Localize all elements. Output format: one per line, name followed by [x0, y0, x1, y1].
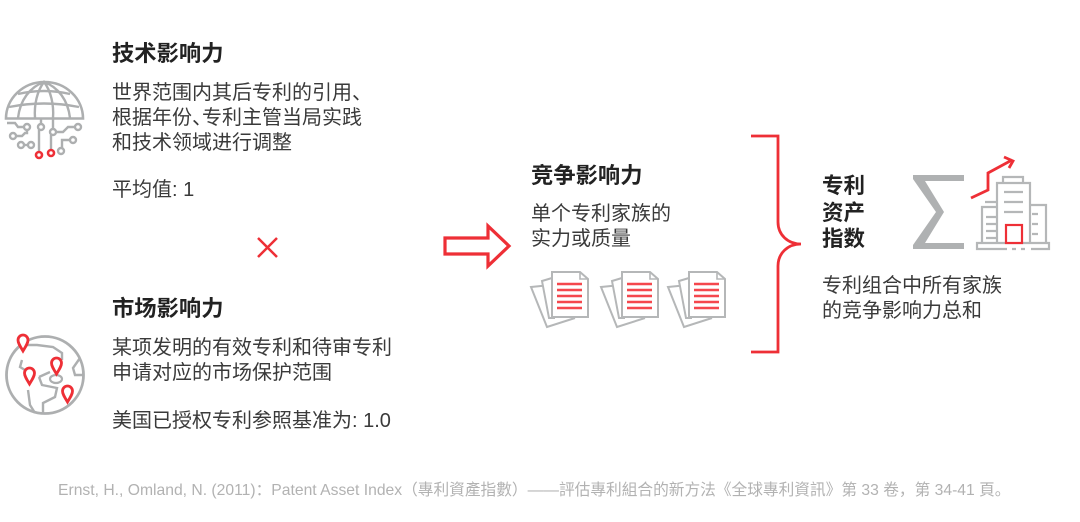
text: market impact description: [112, 337, 392, 384]
text: competitive impact description: [531, 203, 671, 250]
heading: patent asset index: 指数: [822, 227, 865, 251]
text: technology impact description: 世界范围内其后专利的引用、: [112, 82, 372, 104]
text: market impact description: 某项发明的有效专利和待审专利: [112, 337, 392, 359]
icon: document stack 3: [668, 272, 725, 327]
text: patent asset index description: 的竞争影响力总和: [822, 300, 982, 322]
heading: patent asset index: 资产: [822, 200, 865, 224]
icon: world map with pins: [6, 335, 84, 414]
icon: multiply sign: [258, 238, 277, 257]
text: patent asset index description: 专利组合中所有家族: [822, 275, 1002, 297]
text: patent asset index description: [822, 275, 1002, 322]
text: market impact description: 申请对应的市场保护范围: [112, 362, 332, 384]
icon: globe with circuit: [6, 82, 83, 154]
text: market benchmark: 美国已授权专利参照基准为: 1.0: [112, 410, 391, 432]
bracket: right curly brace: [751, 136, 801, 352]
source citation: Ernst, H., Omland, N. (2011)：Patent Asset Index（專利資產指數）——評估專利組合的新方法《全球專利資訊》第 33 卷，第 34-41 頁。: [58, 482, 1010, 499]
text: technology impact description: 根据年份、专利主管当局实践: [112, 107, 362, 129]
arrow: right outline arrow: [445, 226, 509, 266]
text: competitive impact description: 实力或质量: [531, 228, 631, 250]
heading: patent asset index: [822, 174, 865, 251]
text: competitive impact description: 单个专利家族的: [531, 203, 671, 225]
text: technology average: 平均值: 1: [112, 179, 194, 201]
heading: technology impact: 技术影响力: [112, 41, 224, 66]
icon: building with rising arrow: [971, 157, 1049, 249]
icon: sigma sign: [913, 175, 964, 249]
text: technology impact description: [112, 82, 372, 154]
heading: competitive impact: 竞争影响力: [531, 163, 642, 188]
text: technology impact description: 和技术领域进行调整: [112, 132, 292, 154]
icon: document stack 1: [531, 272, 588, 327]
icon: document stack 2: [601, 272, 658, 327]
heading: market impact: 市场影响力: [112, 296, 224, 321]
heading: patent asset index: 专利: [822, 174, 865, 198]
